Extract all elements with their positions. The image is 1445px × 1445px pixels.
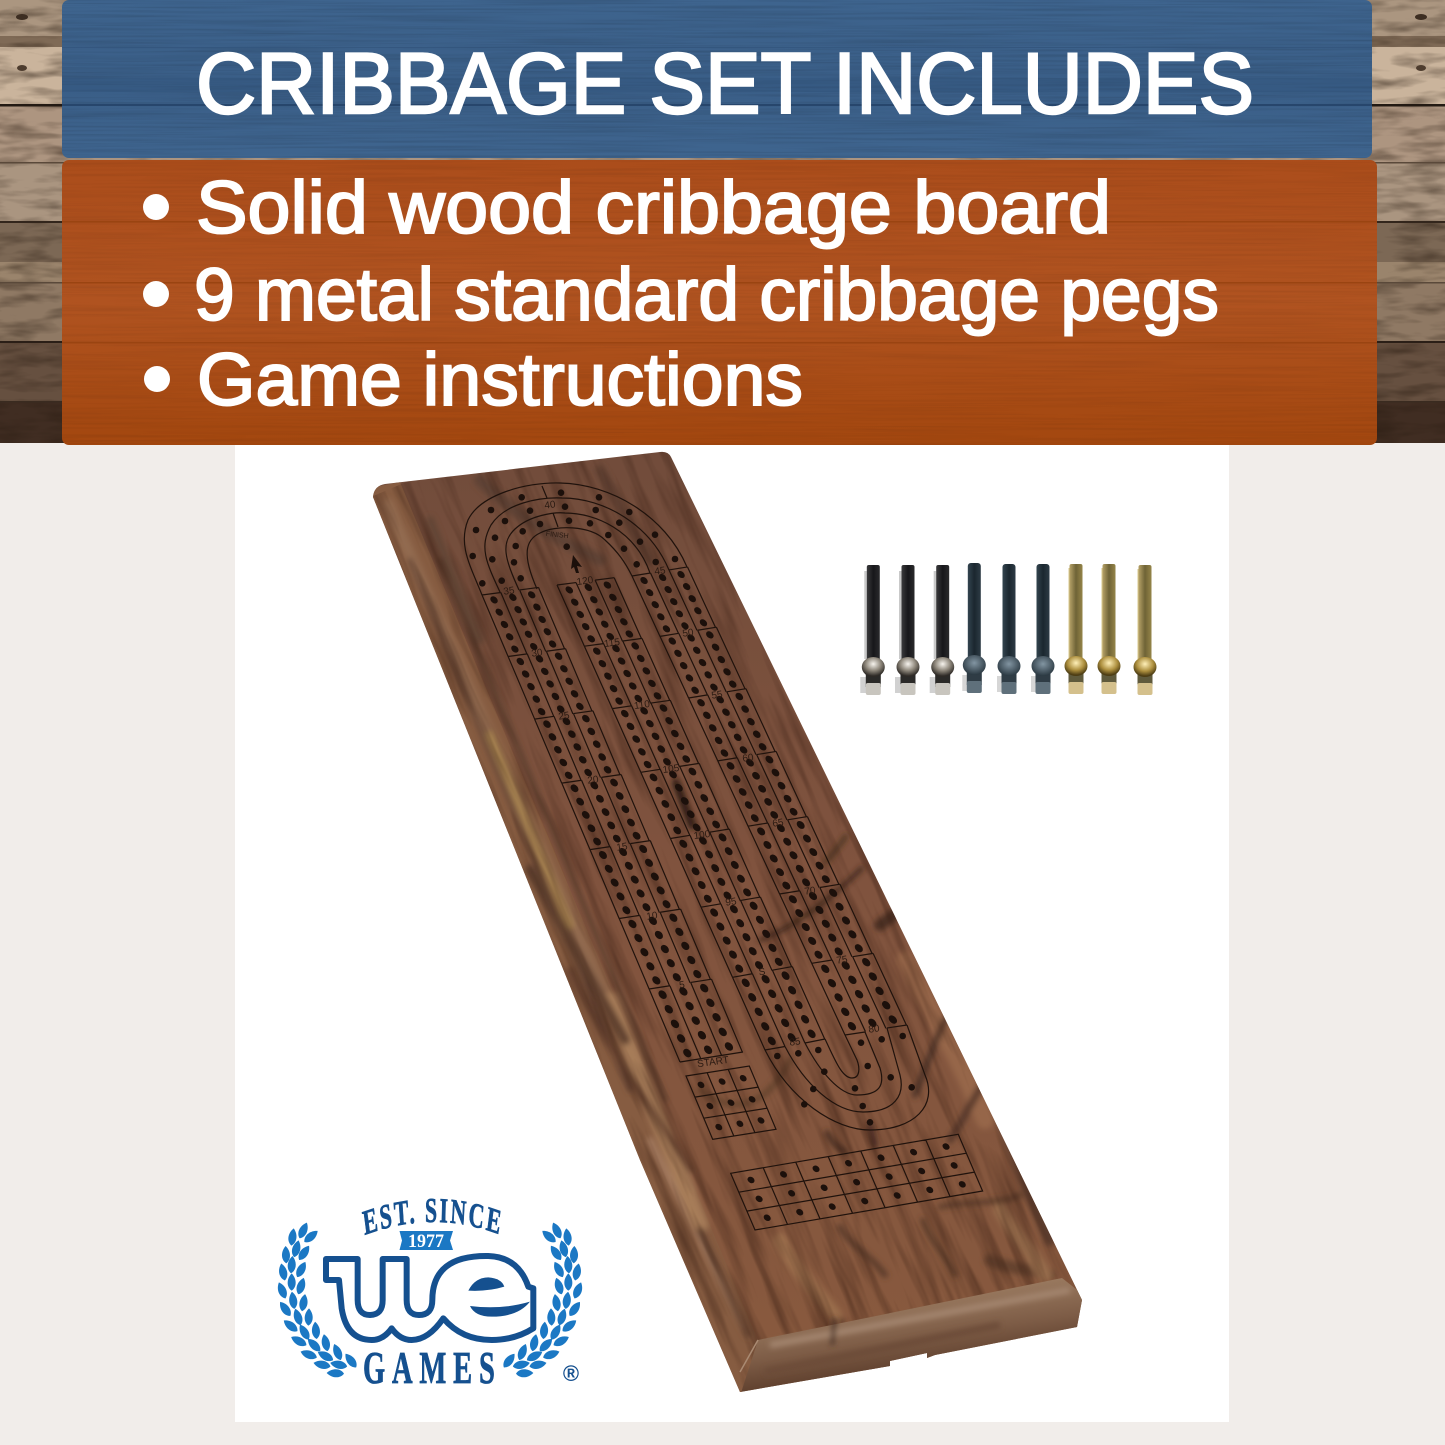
icon: gunmetal peg 2: [997, 564, 1020, 694]
7x3 peg grid: [731, 1134, 983, 1230]
track score numbers: 25: [558, 710, 571, 723]
icon: left laurel wreath: [275, 1221, 359, 1378]
track score numbers: 65: [772, 817, 785, 830]
wood plank header background: [0, 0, 1445, 443]
icon: silver peg 2: [895, 565, 920, 695]
bullet item: game instructions: Game instructions: [197, 338, 803, 421]
finish label: FINISH: [545, 531, 569, 540]
icon: brass peg 3: [1134, 565, 1156, 695]
track score numbers: 30: [531, 647, 544, 660]
track score numbers: 15: [616, 841, 629, 854]
panel: orange contents list: [62, 160, 1377, 445]
board wood body: [373, 452, 1082, 1392]
track score numbers: 60: [742, 752, 755, 765]
WE wordmark: [326, 1256, 533, 1340]
track score numbers: 95: [725, 896, 738, 909]
track score numbers: 40: [544, 499, 557, 512]
track score numbers: 45: [654, 565, 667, 578]
WE Games logo: [278, 1198, 582, 1394]
1977 ribbon: 1977: [408, 1231, 444, 1252]
registered mark: ®: [563, 1361, 579, 1386]
scoring track: centre group: [557, 578, 825, 1050]
track score numbers: 20: [587, 774, 600, 787]
white product area: [235, 443, 1229, 1422]
track score numbers: [503, 499, 881, 1070]
track score numbers: 100: [693, 829, 712, 842]
track score numbers: 10: [646, 910, 659, 923]
front bevel: [740, 1278, 1090, 1396]
title: CRIBBAGE SET INCLUDES: [196, 36, 1254, 132]
track score numbers: 80: [868, 1023, 881, 1036]
panel: blue title banner: [62, 0, 1372, 158]
3x3 peg grid: [686, 1066, 776, 1139]
track score numbers: 110: [633, 699, 651, 712]
wood grain texture: [373, 452, 1077, 1386]
games text: GAMES: [363, 1343, 502, 1394]
bottom U track: [765, 1025, 929, 1130]
icon: brass peg 2: [1098, 564, 1120, 694]
track score numbers: 105: [662, 763, 681, 776]
track score numbers: S: [758, 967, 766, 978]
scoring track: right group: [632, 567, 907, 1035]
track score numbers: 35: [503, 585, 516, 598]
track score numbers: 70: [804, 885, 817, 898]
icon: finish arrow: [571, 555, 582, 573]
cribbage board: [373, 452, 1082, 1392]
icon: silver peg 1: [860, 565, 885, 695]
nine metal pegs: [860, 563, 1156, 695]
icon: gunmetal peg 1: [962, 563, 986, 693]
bullet item: solid wood board: Solid wood cribbage board: [196, 166, 1111, 249]
track score numbers: 120: [576, 575, 595, 588]
est since arc text: [362, 1198, 501, 1236]
track score numbers: 75: [836, 954, 849, 967]
top arc track: [464, 483, 687, 595]
track score numbers: 5: [679, 980, 686, 991]
est since arc text: EST. SINCE: [362, 1198, 501, 1236]
track score numbers: 50: [682, 627, 695, 640]
track score numbers: 85: [789, 1036, 802, 1049]
track score numbers: START: [697, 1055, 730, 1070]
bullet item: metal pegs: 9 metal standard cribbage pegs: [194, 253, 1219, 336]
icon: right laurel wreath: [501, 1221, 585, 1378]
left bevel: [360, 482, 758, 1400]
icon: silver peg 3: [930, 565, 954, 695]
scoring track: left group: [482, 587, 743, 1062]
icon: brass peg 1: [1064, 564, 1088, 694]
icon: gunmetal peg 3: [1031, 564, 1054, 694]
track score numbers: 115: [603, 637, 621, 650]
track score numbers: 55: [711, 689, 724, 702]
